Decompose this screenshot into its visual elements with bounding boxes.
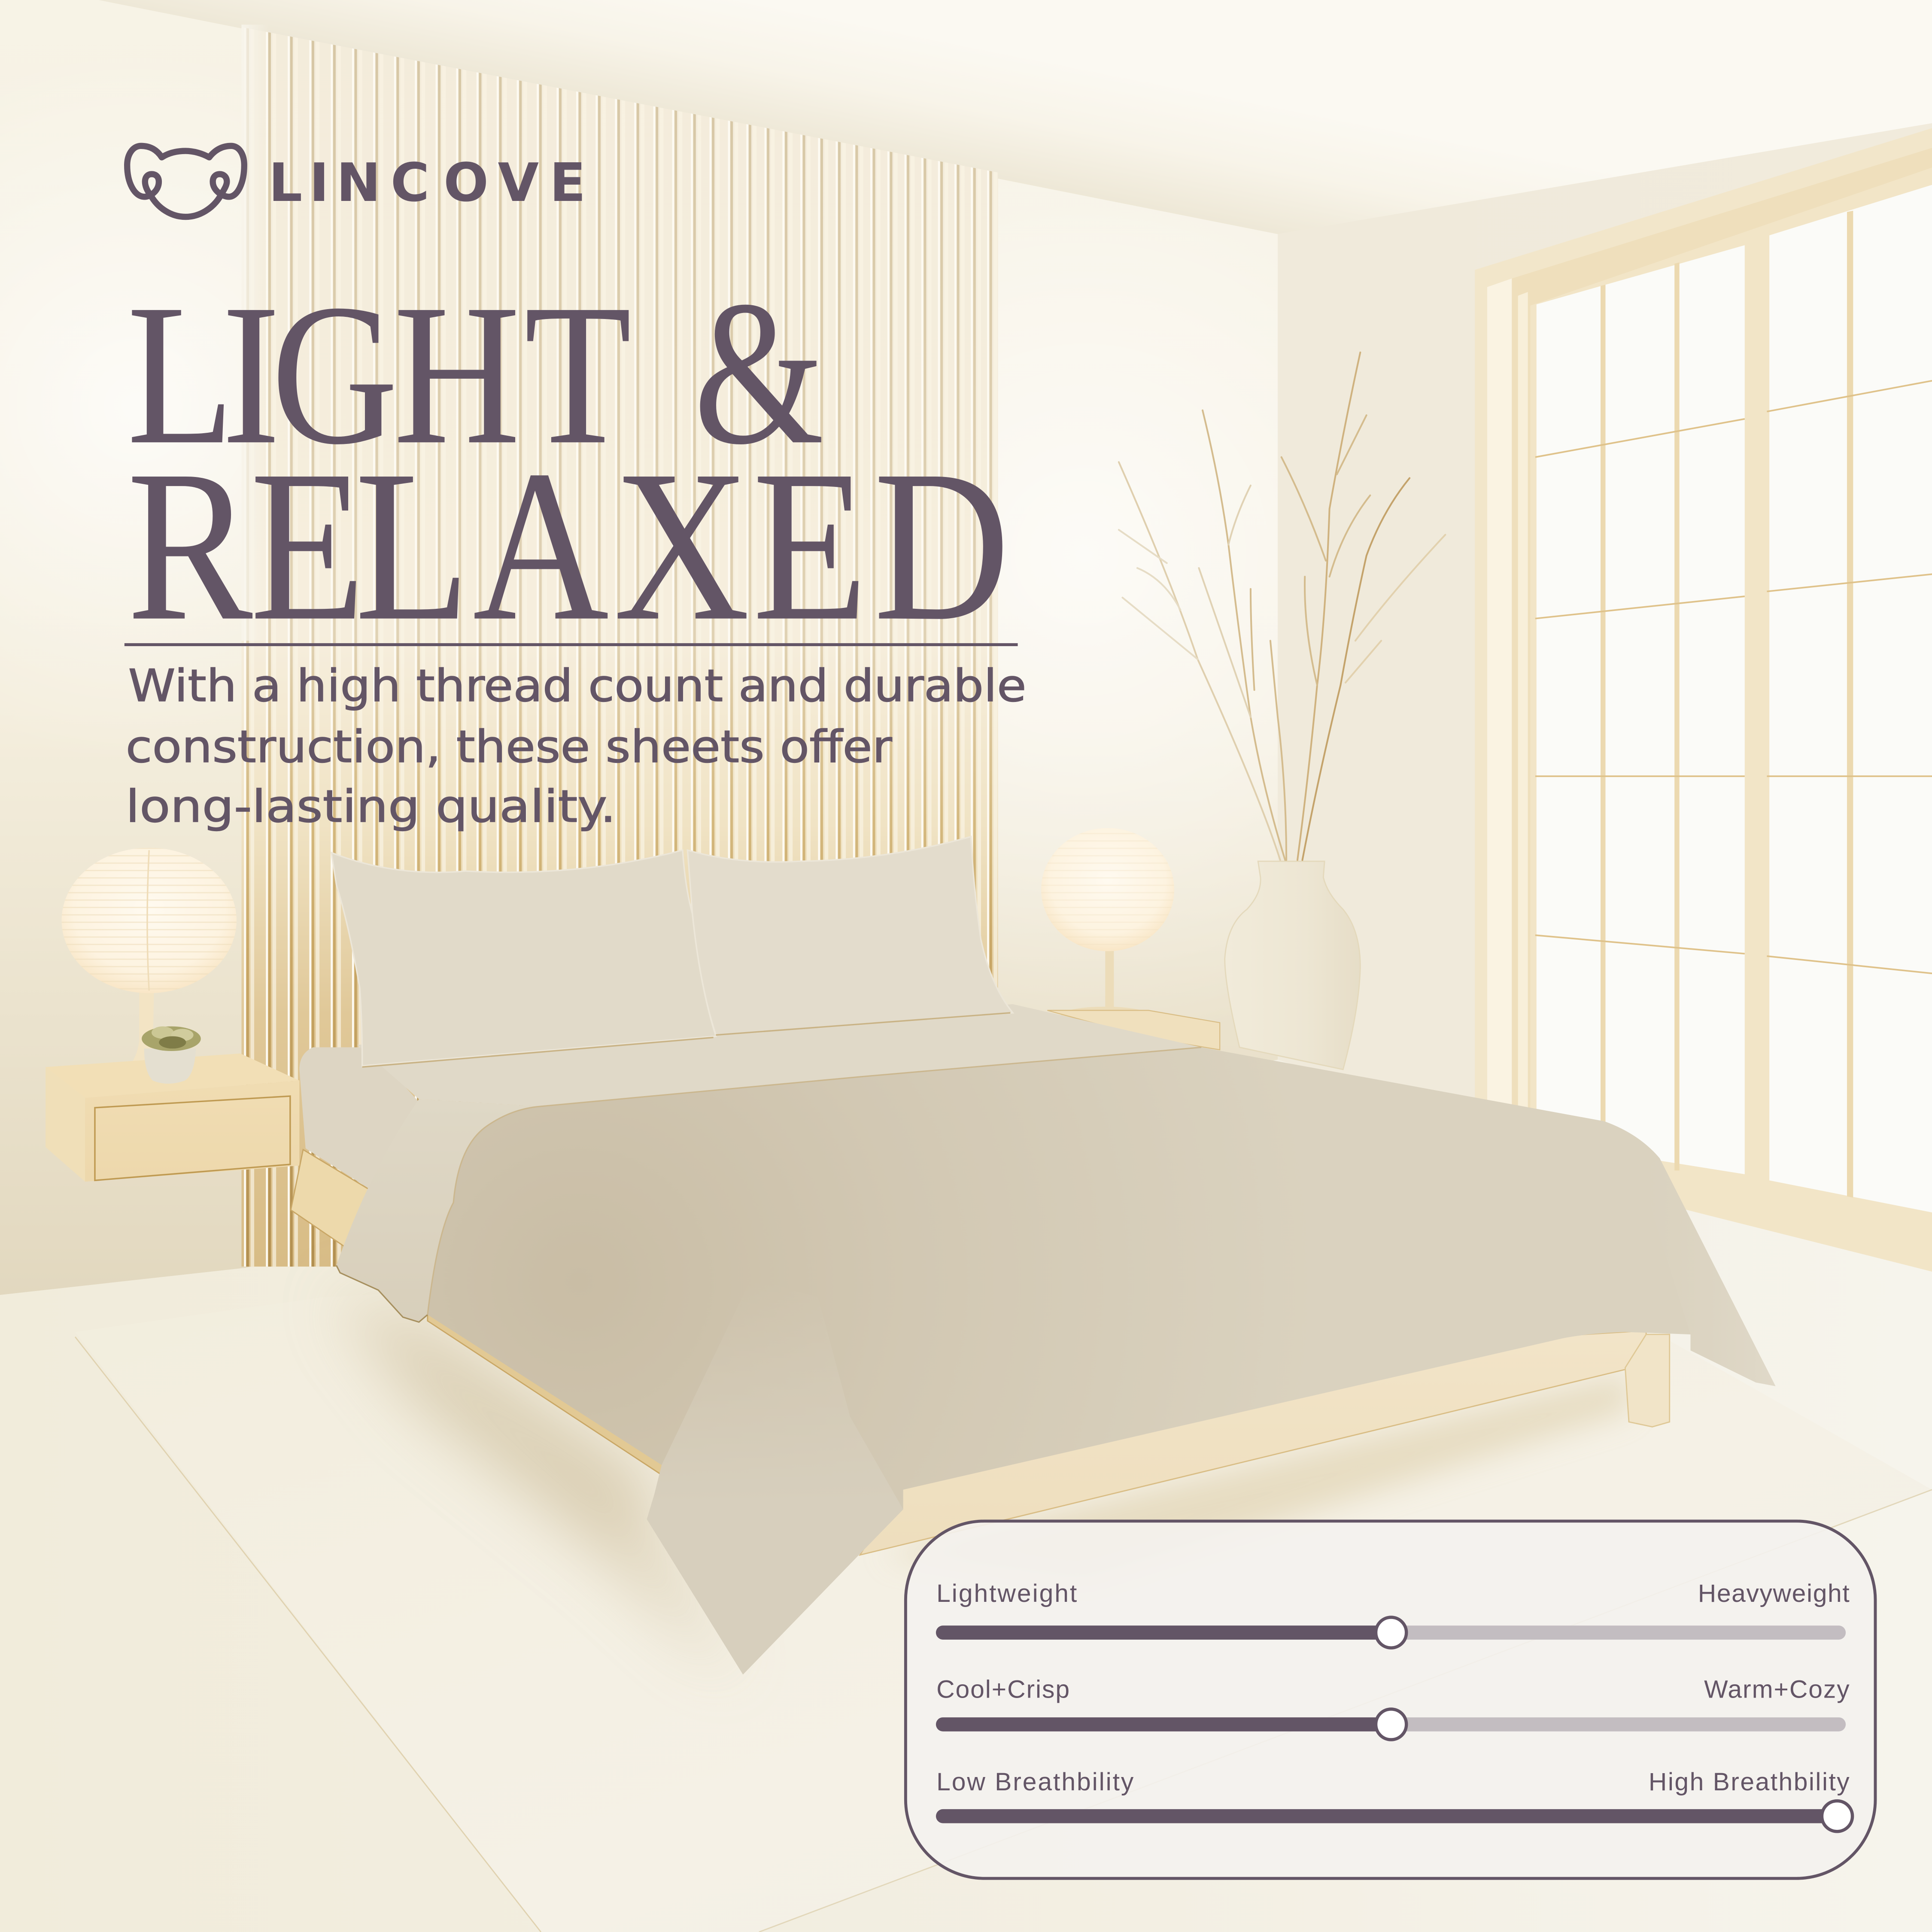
title: & [694,258,824,487]
left lamp [61,848,237,1077]
rug front edge [759,1490,1932,1932]
right nightstand [1047,1010,1220,1050]
rug [75,1232,1932,1932]
description text: long-lasting quality. [126,781,616,832]
potted plant [142,1027,201,1084]
window inner frame [1512,148,1932,1272]
mattress [299,1047,425,1189]
wall light right [592,99,1278,1084]
vase [1225,861,1360,1069]
window reveal [1487,279,1512,1158]
slider: breathability: Low Breathbility [936,1768,1134,1796]
bed frame front rail [860,1331,1646,1555]
window outer frame [1475,128,1932,1272]
slider: temperature [936,1676,1850,1740]
description text: construction, these sheets offer [126,721,892,773]
slider: breathability [936,1768,1853,1832]
slider: temperature: Warm+Cozy [1704,1676,1850,1704]
pillow right [687,837,1013,1035]
brand logo [127,146,586,217]
glass panes right sash [1769,185,1932,1212]
description text [126,660,1027,832]
ceiling [99,0,1932,234]
slider: temperature: Cool+Crisp [936,1676,1069,1704]
description text: With a high thread count and durable [128,660,1027,712]
title rule [125,643,1018,646]
right lamp [1041,828,1174,1024]
dried branches [1119,352,1445,860]
duvet right drape [1639,1158,1776,1386]
title: LIGHT [127,263,632,486]
left wall softening over slats [241,24,269,641]
duvet [428,1047,1776,1674]
floor [0,1060,1932,1932]
rug left edge [75,1337,541,1932]
pillow seam lines [362,1013,1010,1067]
icon: koala mark [127,146,244,217]
duvet corner drape [647,1278,903,1674]
horizontal muntins [1535,381,1932,973]
duvet flap [336,1099,540,1322]
top sheet [357,1004,1201,1106]
title: RELAXED [127,426,1010,666]
under-bed shadow left [333,1294,739,1682]
duvet fold line [428,1047,1201,1315]
wall light left [0,0,616,863]
bed [291,837,1776,1674]
slatted headboard wall [241,0,998,1269]
slider: weight [936,1580,1850,1648]
pillow left [331,850,716,1066]
left nightstand [46,1054,299,1182]
window [1475,128,1932,1272]
glass panes left sash [1537,245,1745,1174]
bed leg [1625,1334,1670,1427]
slider: breathability: High Breathbility [1649,1768,1850,1796]
slider: weight: Heavyweight [1698,1580,1850,1607]
bed frame left rail [291,1150,368,1247]
under-bed shadow front [881,1374,1629,1583]
slider: weight: Lightweight [936,1580,1077,1607]
vertical mullions [1601,211,1853,1198]
title [127,258,1010,666]
flap bottom hem [336,1265,428,1322]
panel: fabric feel sliders [905,1521,1875,1878]
back wall [0,0,1278,1295]
side wall [1278,123,1932,1282]
bed frame side rail [428,1303,665,1475]
wordmark: LINCOVE [269,152,586,214]
